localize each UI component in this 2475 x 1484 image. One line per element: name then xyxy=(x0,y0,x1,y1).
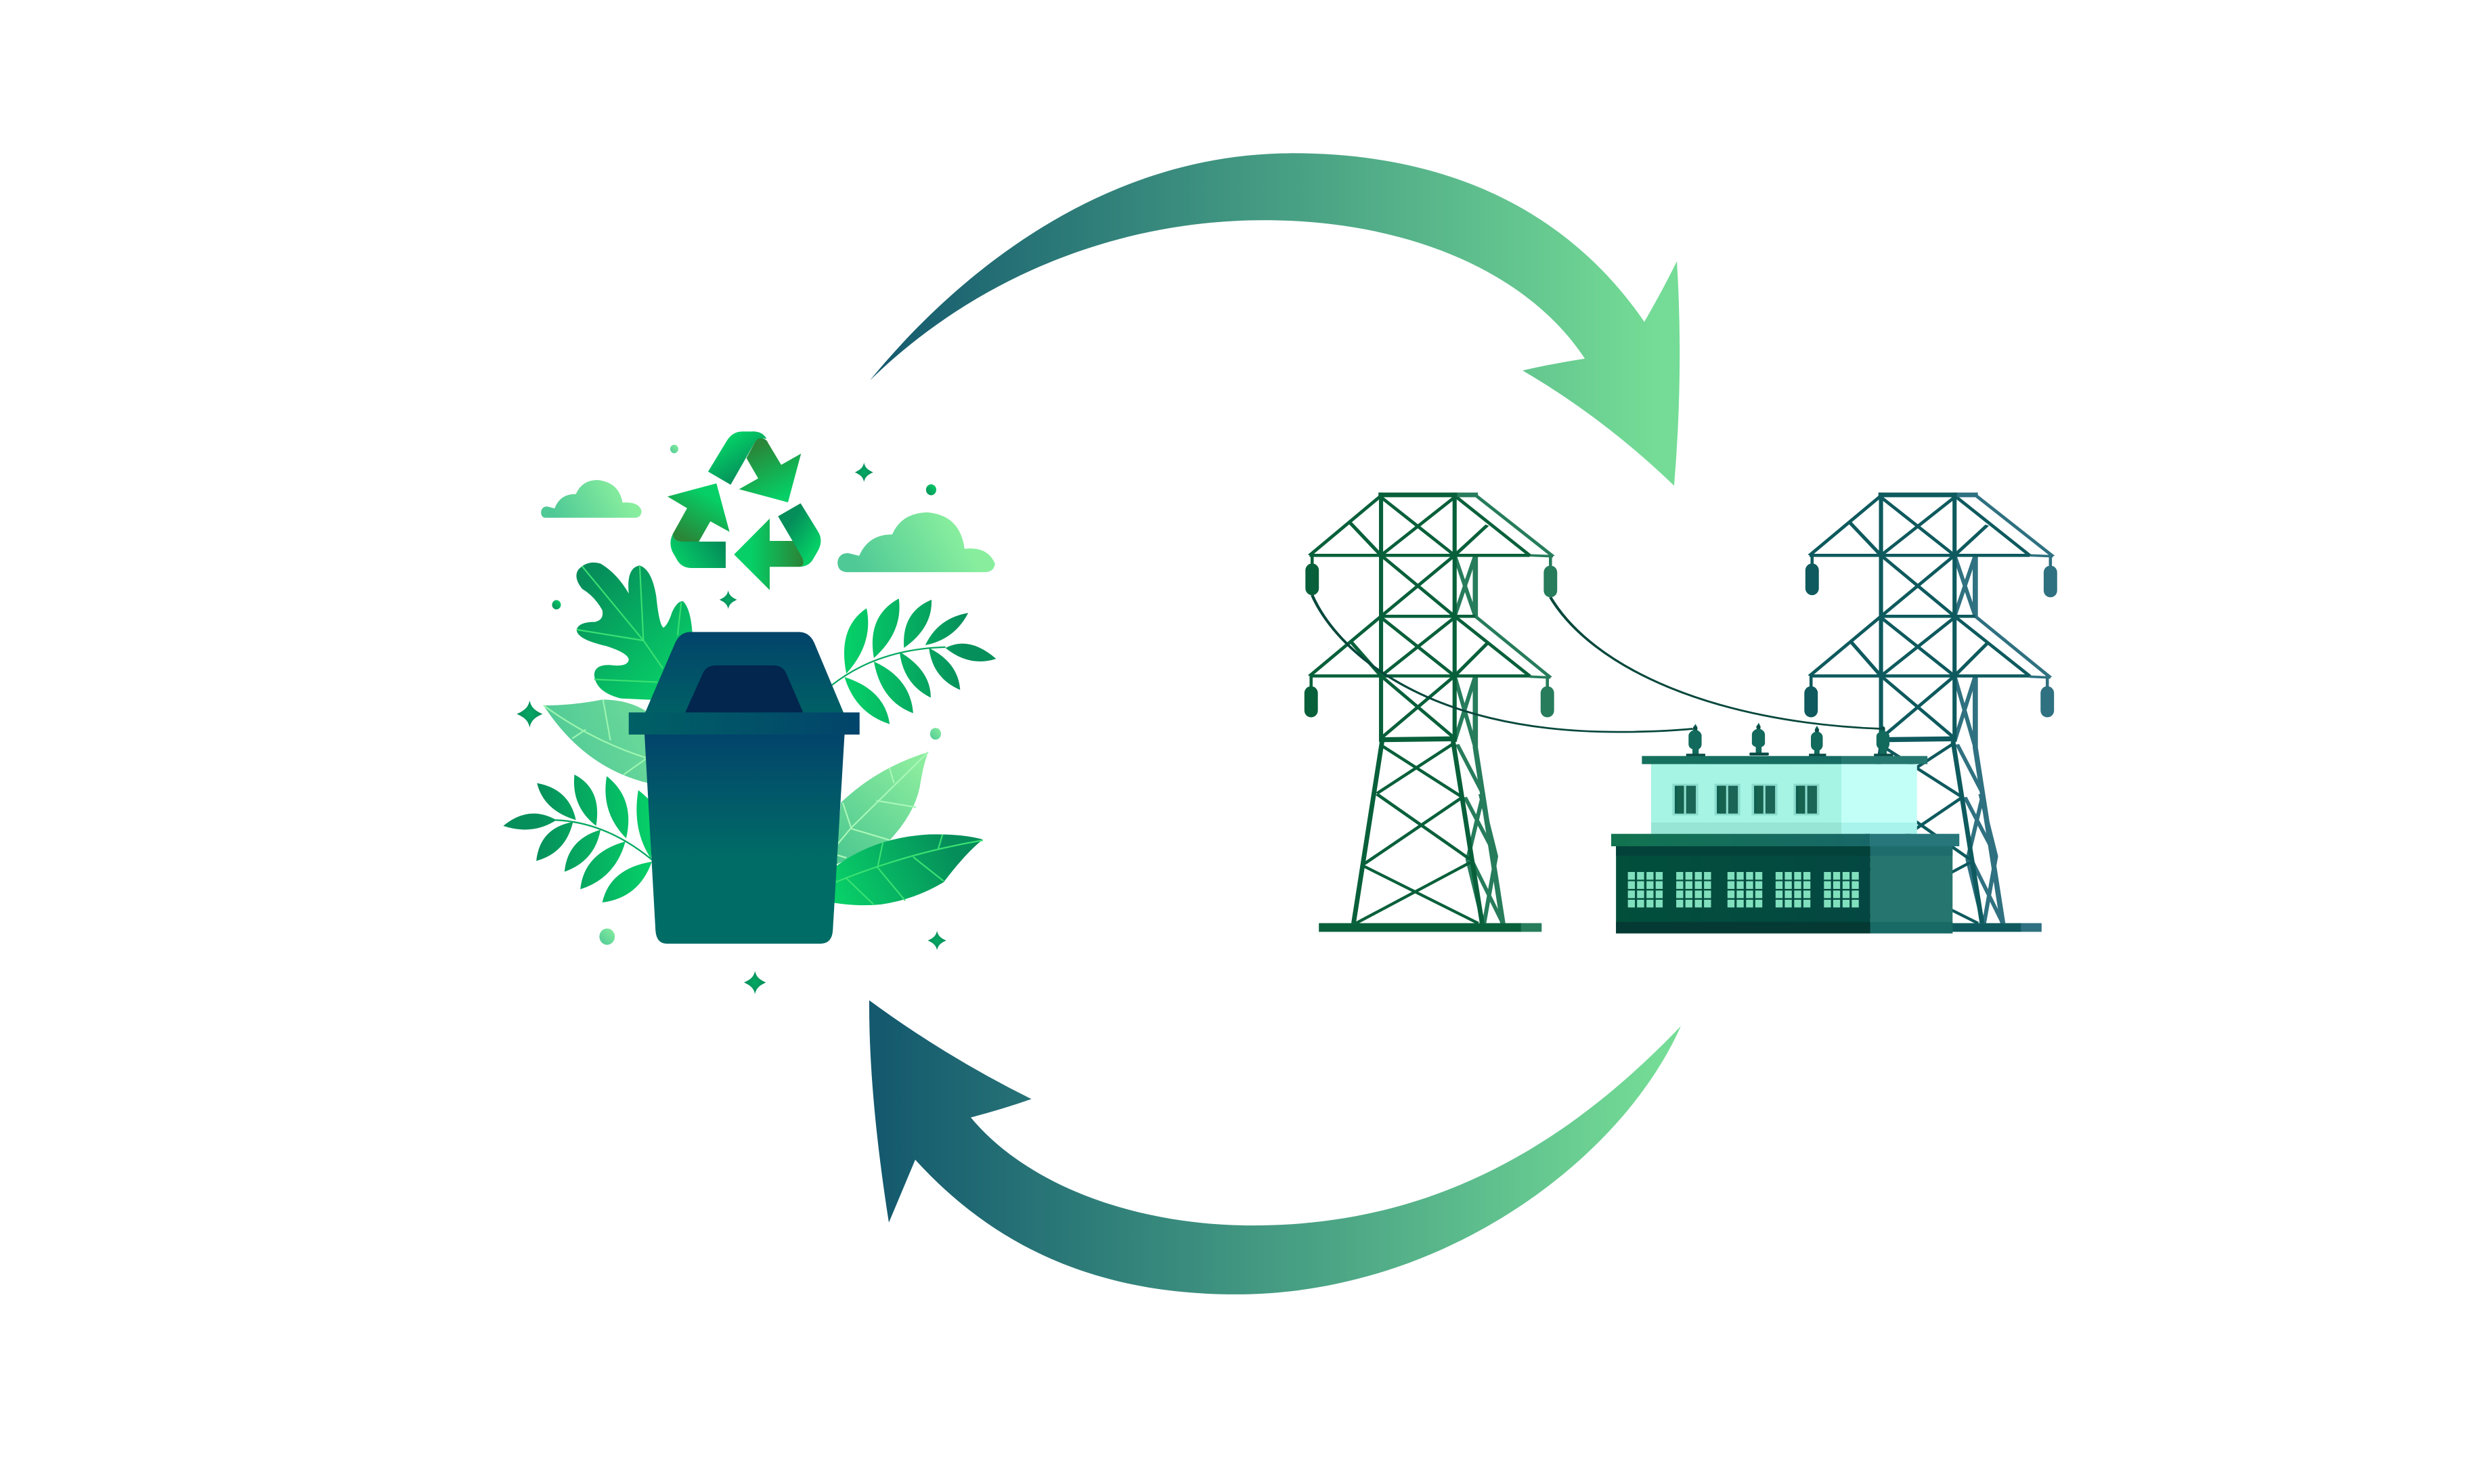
leaf: light left xyxy=(544,699,648,783)
cloud: right xyxy=(837,512,995,572)
insulators on roof xyxy=(1686,722,1893,756)
fern: lower left xyxy=(503,774,652,902)
illustration: recycling bin with plants xyxy=(503,445,996,994)
leaf: large dark right xyxy=(834,834,983,905)
fern: upper right xyxy=(832,598,996,724)
decorative sparkles and dots xyxy=(517,445,946,994)
leaf: light right xyxy=(835,752,928,865)
tower: left xyxy=(1305,493,1557,932)
icon: recycling symbol xyxy=(667,431,820,590)
upper windows xyxy=(1672,784,1819,815)
lower windows xyxy=(1628,872,1859,907)
lower storey xyxy=(1611,834,1959,934)
illustration: transmission towers and substation xyxy=(1305,493,2057,932)
cloud: left xyxy=(541,480,642,518)
arrow: top curved arrow from waste to power xyxy=(870,153,1680,485)
trash bin xyxy=(629,632,860,944)
leaf: oak xyxy=(576,563,693,701)
power lines xyxy=(1312,595,1882,732)
tower: right xyxy=(1804,493,2057,932)
upper storey xyxy=(1642,756,1927,834)
arrow: bottom curved arrow from power to waste xyxy=(869,1001,1681,1294)
substation building xyxy=(1611,722,1959,934)
